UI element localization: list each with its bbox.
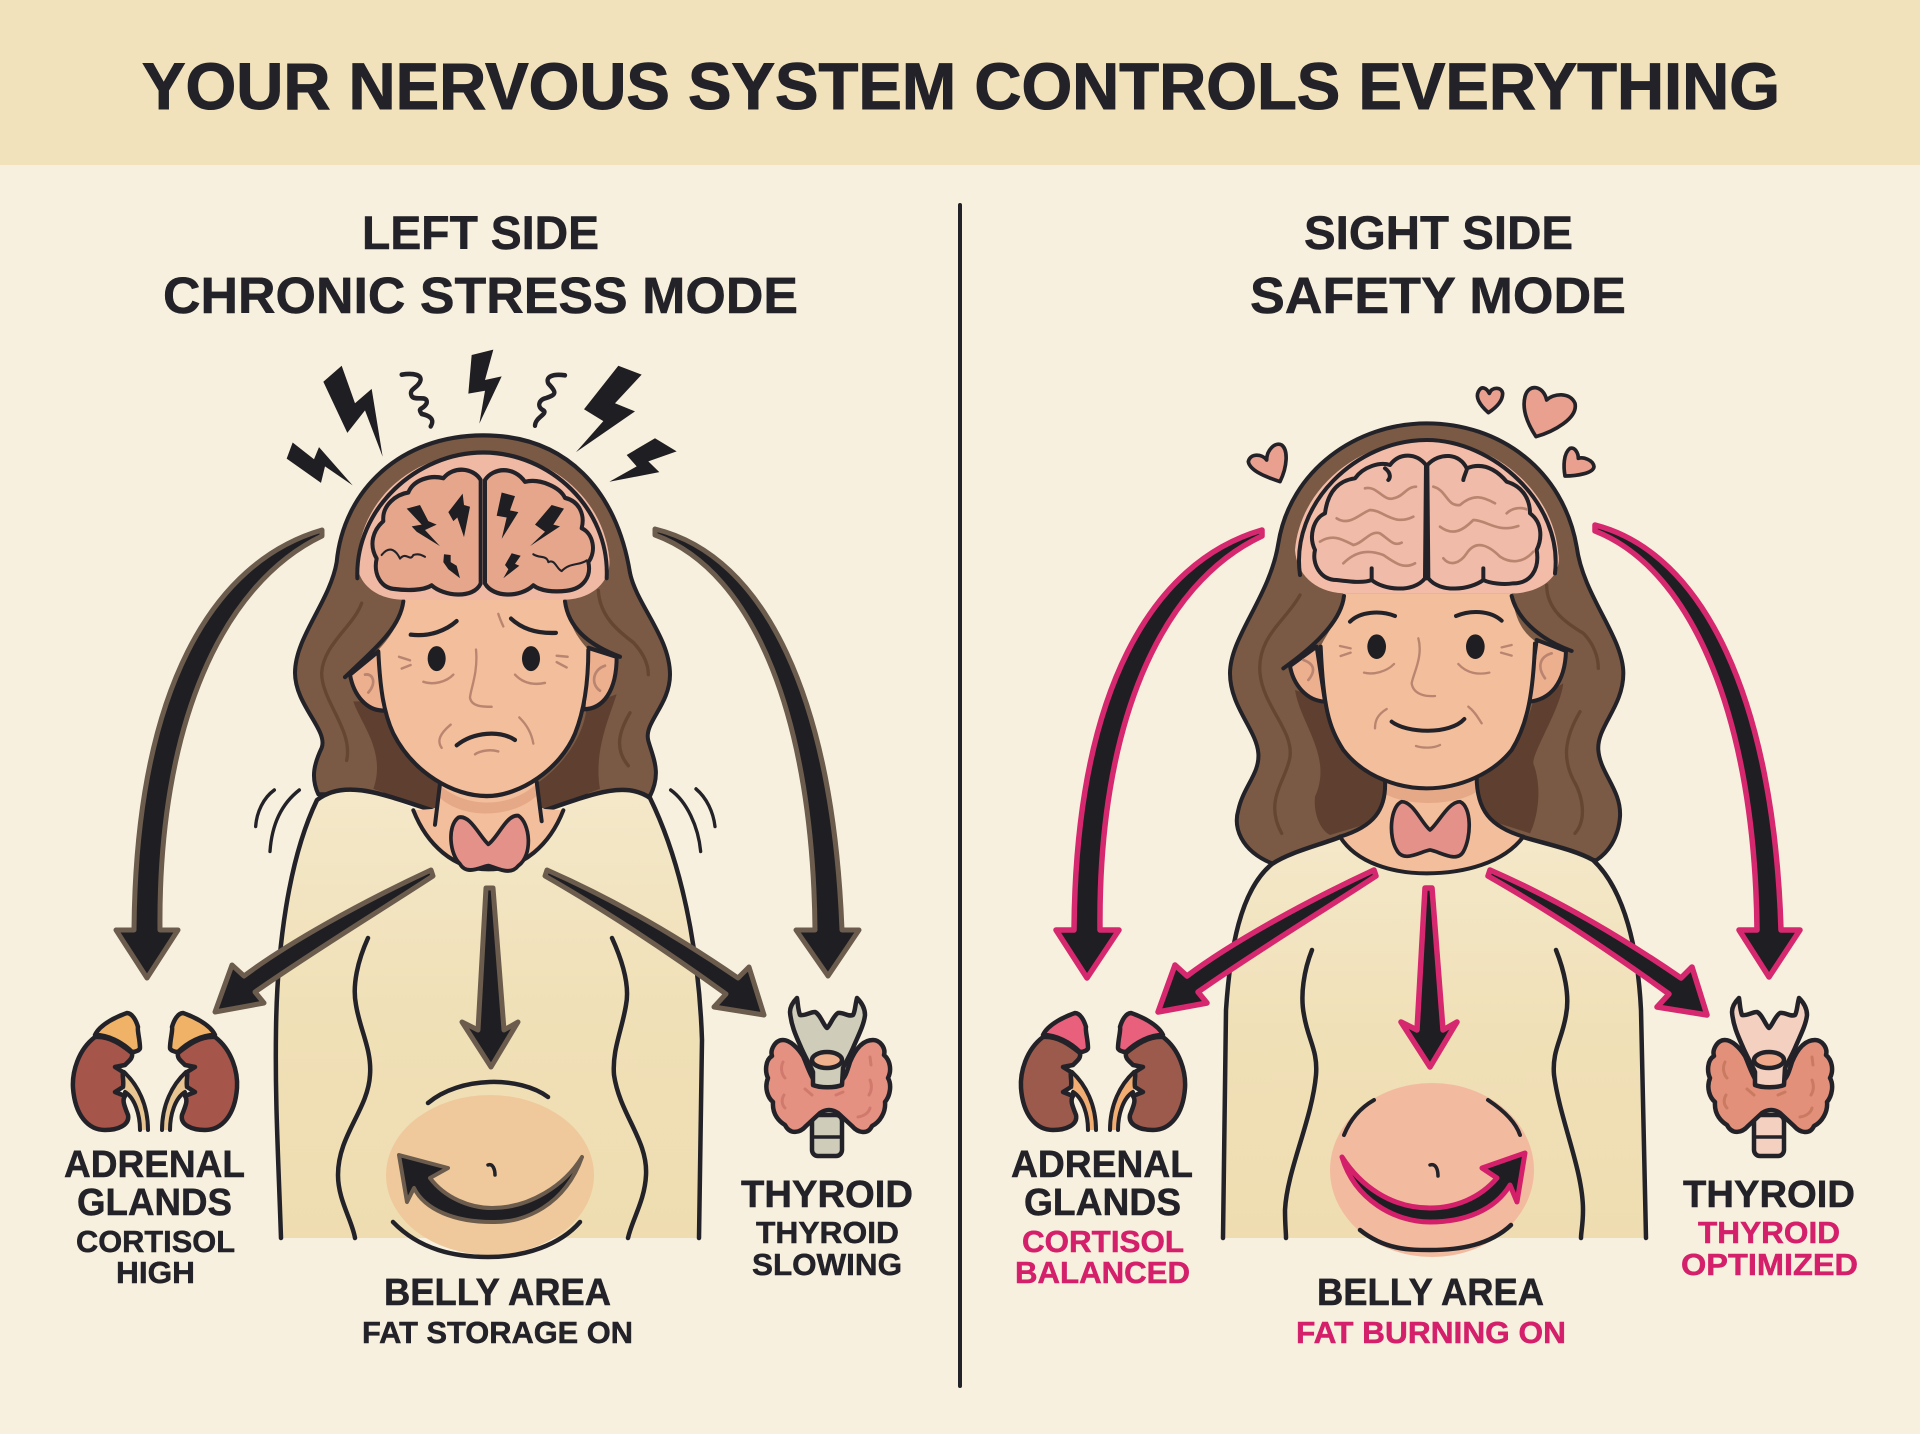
- center divider: [958, 205, 962, 1386]
- skull cap: [357, 452, 610, 600]
- brain bolts: [407, 492, 564, 578]
- face: [1321, 593, 1536, 788]
- label: thyroid: THYROID: [756, 1215, 899, 1250]
- label: optimized thyroid: [1681, 1174, 1858, 1282]
- title: YOUR NERVOUS SYSTEM CONTROLS EVERYTHING: [142, 49, 1780, 123]
- ears: [350, 651, 387, 711]
- icon: adrenal glands and kidneys: [73, 1013, 237, 1130]
- label: adrenal glands: CORTISOL: [76, 1224, 235, 1259]
- belly arrow: [1342, 1153, 1525, 1222]
- label: thyroid: [741, 1174, 913, 1282]
- label: balanced adrenal glands: GLANDS: [1024, 1182, 1181, 1224]
- label: adrenal glands: ADRENAL: [64, 1144, 245, 1186]
- skull cap: [1295, 440, 1559, 593]
- label: optimized thyroid: THYROID: [1683, 1174, 1855, 1216]
- label: balanced adrenal glands: CORTISOL: [1022, 1224, 1184, 1259]
- label: belly area: FAT STORAGE ON: [362, 1315, 633, 1350]
- label: adrenal glands: [64, 1144, 245, 1290]
- left panel heading: CHRONIC STRESS MODE: [163, 267, 798, 324]
- safety face and head: [1248, 388, 1594, 873]
- neck: [413, 780, 563, 869]
- right panel heading: SIGHT SIDE: [1304, 206, 1573, 259]
- stress torso: [276, 789, 702, 1238]
- right panel heading: [1250, 206, 1626, 324]
- happy expression: [1340, 612, 1512, 748]
- right panel heading: SAFETY MODE: [1250, 267, 1626, 324]
- neck thyroid: [451, 816, 528, 871]
- left panel heading: LEFT SIDE: [362, 206, 599, 259]
- brain: [372, 470, 481, 595]
- shoulder tremor marks: [256, 789, 715, 851]
- safety arrows: [1056, 525, 1800, 1067]
- face: [378, 598, 588, 796]
- icon: optimized thyroid: [1708, 998, 1832, 1156]
- label: balanced adrenal glands: BALANCED: [1015, 1255, 1190, 1290]
- panel: chronic stress mode: [64, 206, 913, 1350]
- neck: [1340, 773, 1523, 873]
- label: belly area: [362, 1272, 633, 1350]
- label: balanced adrenal glands: ADRENAL: [1011, 1144, 1193, 1186]
- brain folds: [1320, 487, 1533, 566]
- ears: [1290, 647, 1325, 702]
- stress face and head: [256, 350, 715, 871]
- label: optimized thyroid: THYROID: [1698, 1215, 1840, 1250]
- safety belly: [1330, 1083, 1534, 1257]
- icon: thyroid: [766, 998, 890, 1156]
- label: optimized thyroid: OPTIMIZED: [1681, 1247, 1858, 1282]
- stress arrows: [116, 529, 859, 1067]
- label: adrenal glands: HIGH: [116, 1255, 195, 1290]
- belly arrow: [399, 1155, 582, 1222]
- brain: [1312, 456, 1426, 589]
- stress lightning bolts: [287, 350, 677, 485]
- label: fat burning belly area: [1296, 1272, 1566, 1350]
- safety hair: [1230, 423, 1623, 863]
- label: fat burning belly area: FAT BURNING ON: [1296, 1315, 1566, 1350]
- neck thyroid: [1391, 802, 1469, 857]
- label: adrenal glands: GLANDS: [77, 1182, 232, 1224]
- panel: safety mode: [1011, 206, 1858, 1350]
- header band: [0, 0, 1920, 165]
- label: thyroid: SLOWING: [752, 1247, 902, 1282]
- left panel heading: [163, 206, 798, 324]
- worried expression: [399, 614, 568, 754]
- hearts: [1248, 388, 1594, 482]
- label: belly area: BELLY AREA: [384, 1272, 611, 1314]
- stress hair: [295, 435, 670, 810]
- stress belly: [386, 1082, 594, 1257]
- label: thyroid: THYROID: [741, 1174, 913, 1216]
- label: fat burning belly area: BELLY AREA: [1317, 1272, 1544, 1314]
- safety torso: [1223, 837, 1646, 1238]
- label: balanced adrenal glands: [1011, 1144, 1193, 1290]
- icon: balanced adrenal glands and kidneys: [1021, 1013, 1185, 1130]
